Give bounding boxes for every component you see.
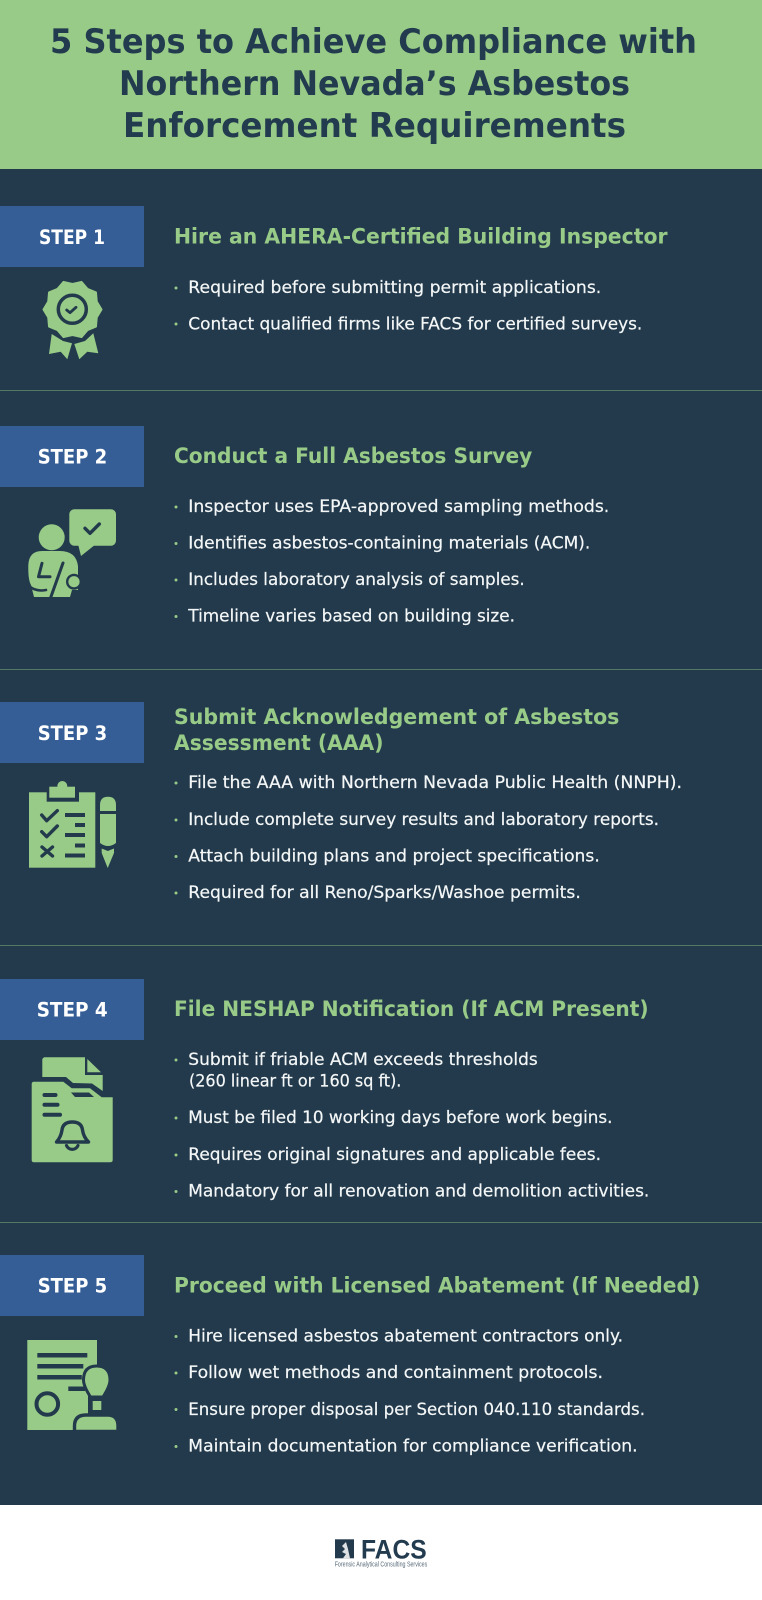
- icon: checklist clipboard and pen: [29, 781, 116, 868]
- step 2 heading: Conduct a Full Asbestos Survey: [174, 444, 532, 469]
- step 2 bullets: Identifies asbestos-containing materials (ACM).: [188, 534, 590, 552]
- step 3 heading: Submit Acknowledgement of Asbestos: [174, 705, 619, 730]
- icon: award rosette: [44, 282, 102, 359]
- step 3 bullets: File the AAA with Northern Nevada Public Health (NNPH).: [188, 773, 682, 792]
- step 4 heading: File NESHAP Notification (If ACM Present): [174, 997, 649, 1022]
- panel: step 2: [0, 426, 609, 626]
- step 3 badge: STEP 3: [38, 722, 107, 745]
- step 2 bullets: [174, 497, 609, 626]
- step 5 bullets: Follow wet methods and containment protocols.: [188, 1363, 603, 1382]
- step 4 badge: [0, 979, 144, 1040]
- step 3 bullets: Attach building plans and project specifications.: [188, 847, 600, 866]
- step 4 bullets: Mandatory for all renovation and demolition activities.: [188, 1182, 649, 1201]
- step 4 bullets: Submit if friable ACM exceeds thresholds: [188, 1050, 538, 1069]
- step 3 heading: Assessment (AAA): [174, 731, 384, 756]
- step 5 bullets: Ensure proper disposal per Section 040.110 standards.: [188, 1400, 645, 1419]
- step 5 bullets: [174, 1327, 645, 1456]
- step 2 badge: [0, 426, 144, 487]
- step 5 bullets: Maintain documentation for compliance verification.: [188, 1437, 638, 1456]
- header panel: [0, 0, 762, 169]
- step 1 badge: [0, 206, 144, 267]
- step 4 badge: STEP 4: [37, 999, 108, 1022]
- icon: inspector with speech bubble: [28, 509, 116, 598]
- step 3 bullets: Include complete survey results and laboratory reports.: [188, 810, 659, 829]
- logo tagline: Forensic Analytical Consulting Services: [335, 1562, 428, 1569]
- step 4 bullets: [174, 1050, 649, 1201]
- title: [50, 22, 697, 146]
- logo wordmark: FACS: [361, 1534, 427, 1564]
- title: Northern Nevada’s Asbestos: [119, 64, 630, 104]
- step 4 bullets: (260 linear ft or 160 sq ft).: [189, 1072, 401, 1091]
- step 5 heading: Proceed with Licensed Abatement (If Needed): [174, 1273, 700, 1298]
- step 5 badge: STEP 5: [38, 1275, 107, 1298]
- step 3 badge: [0, 702, 144, 763]
- panel: step 1: [0, 206, 668, 359]
- step 1 bullets: Required before submitting permit applications.: [188, 278, 601, 297]
- step 5 bullets: Hire licensed asbestos abatement contractors only.: [188, 1327, 623, 1346]
- panel: step 5: [0, 1255, 700, 1456]
- step 2 bullets: Includes laboratory analysis of samples.: [188, 570, 525, 589]
- step 1 heading: Hire an AHERA-Certified Building Inspector: [174, 224, 668, 250]
- step 3 bullets: [174, 773, 682, 902]
- step 3 heading: [174, 705, 619, 756]
- step 4 bullets: Requires original signatures and applicable fees.: [188, 1145, 601, 1164]
- step 3 bullets: Required for all Reno/Sparks/Washoe permits.: [188, 883, 581, 902]
- step 2 bullets: Timeline varies based on building size.: [187, 606, 515, 626]
- icon: folder with document and bell: [32, 1057, 113, 1162]
- logo mark: [335, 1539, 354, 1558]
- step 5 badge: [0, 1255, 144, 1316]
- step 1 bullets: Contact qualified firms like FACS for certified surveys.: [188, 314, 642, 334]
- icon: document with stamp: [27, 1340, 118, 1432]
- step 1 bullets: [174, 278, 642, 334]
- step 1 badge: STEP 1: [39, 226, 105, 249]
- title: 5 Steps to Achieve Compliance with: [50, 22, 697, 62]
- title: Enforcement Requirements: [123, 106, 626, 146]
- panel: step 4: [0, 979, 649, 1201]
- panel: step 3: [0, 702, 682, 902]
- step 2 bullets: Inspector uses EPA-approved sampling methods.: [188, 497, 609, 516]
- FACS logo: [335, 1534, 428, 1569]
- step 4 bullets: Must be filed 10 working days before work begins.: [188, 1108, 613, 1127]
- step 2 badge: STEP 2: [38, 446, 107, 468]
- footer panel: [0, 1505, 762, 1600]
